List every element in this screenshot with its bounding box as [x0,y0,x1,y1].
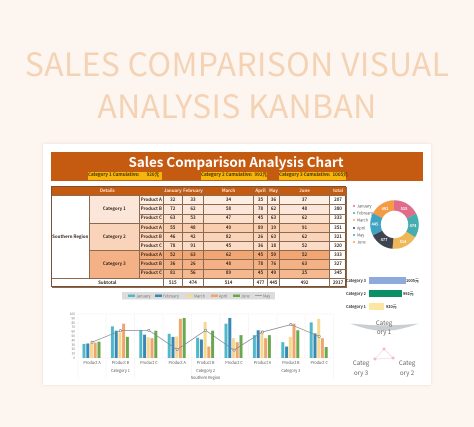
sales data table: 62 [226,252,231,258]
sales data table: 58 [226,206,231,212]
sales data table: 48 [302,206,307,212]
sales data table: 19 [271,225,276,231]
x axis labels: Product A [254,360,272,366]
title bar [51,152,423,181]
donut chart: 445 [372,222,379,228]
white sheet panel [43,144,431,385]
category 2 label: Categ [399,358,416,367]
category progress bars: Category 1 [346,304,366,310]
cumulative label 3: Category 3 Cumulative: 1005元 [279,172,348,178]
sales data table: 320 [334,243,342,249]
y axis labels: 100 [70,311,75,316]
sales data table: 477 [257,280,264,286]
sales data table [51,186,346,287]
curved category 1 shape [350,324,419,331]
sales data table: Product B [141,261,162,267]
chart legend: January [136,294,151,300]
sales data table: 55 [170,225,175,231]
sales data table: 515 [169,280,177,286]
sales data table: Subtotal [98,280,116,286]
page title [25,40,449,128]
sales data table: February [183,188,203,194]
donut chart: 492 [382,207,389,212]
sales data table: Category 1 [103,206,126,212]
x axis labels [83,360,328,381]
sales data table: 91 [302,225,307,231]
sales data table: 380 [334,206,342,212]
y axis labels: 20 [71,346,75,351]
category 3 label: Categ [353,358,370,367]
sales data table: 514 [225,280,232,286]
category progress bars: Category 2 [346,291,367,297]
sales data table: 492 [301,280,308,286]
y axis labels: 70 [71,324,75,329]
May line series [91,324,320,351]
sales data table: 474 [189,280,197,286]
sales data table: 63 [271,215,276,221]
x axis labels: Category 2 [196,368,215,374]
sales data table: March [222,188,235,194]
sales data table: 45 [258,252,263,258]
x axis labels: Product B [282,360,300,366]
y axis labels: 0 [73,355,75,360]
sales data table: Product C [141,270,162,276]
sales data table: 25 [302,270,307,276]
sales data table: Product A [141,225,162,231]
sales data table: 36 [170,261,175,267]
sales data table: 63 [190,252,196,258]
sales data table: 36 [258,243,263,249]
sales data table: 62 [302,234,307,240]
sales data table: Product B [141,206,162,212]
sales data table: 333 [334,252,342,258]
sales data table: 63 [271,234,276,240]
sales data table: 56 [190,270,196,276]
x axis labels: Category 3 [281,368,300,374]
sales data table: Product C [141,215,162,221]
sales data table: Product B [141,234,162,240]
sales data table: 333 [334,215,342,221]
sales data table: 62 [271,206,276,212]
donut legend: January [357,204,372,210]
x axis labels: Category 1 [111,368,130,374]
sales data table: 45 [258,215,263,221]
sales data table: 52 [170,252,175,258]
y axis labels: 60 [71,329,75,334]
category 1 label: Categ [376,318,393,327]
chart title: Sales Comparison Analysis Chart [128,151,344,171]
donut chart: 515 [401,207,408,212]
sales data table: 26 [258,234,263,240]
sales data table: 37 [302,197,307,203]
chart legend: April [219,294,227,300]
sales data table: 89 [258,225,263,231]
chart legend: June [241,294,250,300]
category progress bars [346,277,419,310]
donut legend: February [357,210,373,216]
category 2 label [399,358,416,377]
sales data table: total [333,188,343,194]
donut legend: April [357,226,365,232]
sales data table: June [299,188,310,194]
sales data table: 78 [258,206,263,212]
sales data table: 33 [190,197,196,203]
y axis labels: 10 [71,351,75,356]
y axis labels [70,311,75,360]
sales data table: 207 [334,197,342,203]
category 1 label: ory 1 [377,327,392,336]
sales data table: 48 [190,225,196,231]
sales data table: 52 [302,252,307,258]
donut legend: June [357,240,366,246]
sales data table: 345 [334,270,342,276]
sales data table: 48 [226,261,231,267]
sales data table: May [269,188,278,194]
y axis labels: 30 [71,342,75,347]
sales data table: 327 [334,261,342,267]
sales data table: 49 [226,225,231,231]
donut legend [353,204,373,246]
x axis labels: Product C [310,360,328,366]
sales data table: January [164,188,182,194]
y axis labels: 50 [71,333,75,338]
sales data table: 76 [271,261,276,267]
sales data table: 78 [258,261,263,267]
x axis labels: Product C [140,360,158,366]
sales data table: 91 [190,243,196,249]
triangle relationship icon [374,348,394,360]
sales data table: 53 [190,215,196,221]
sales data table: 49 [271,270,276,276]
sales data table: 81 [170,270,175,276]
sales data table: 63 [170,215,175,221]
chart legend [122,292,275,300]
sales data table: 59 [271,252,276,258]
sales data table: 47 [226,215,231,221]
sales data table: 34 [226,197,231,203]
category 3 label: ory 3 [354,368,369,377]
y axis labels: 90 [71,315,75,320]
cumulative label 1: Category 1 Cumulative: 920元 [88,172,159,178]
sales data table: April [255,188,266,194]
category progress bars: 1005元 [406,279,419,284]
x axis labels: Product B [112,360,130,366]
sales data table: Product A [141,197,162,203]
sales data table: 82 [226,234,231,240]
sales data table: 63 [302,261,307,267]
sales data table: Product A [141,252,162,258]
sales data table: 45 [258,270,263,276]
sales data table: 32 [170,197,175,203]
donut chart [372,206,417,245]
donut chart: 477 [381,238,388,243]
x axis labels: Product A [83,360,101,366]
category 1 label [376,318,393,336]
clustered bar chart [82,318,328,358]
sales data table: 62 [302,215,307,221]
category progress bars: 992元 [403,292,414,297]
sales data table: 72 [170,206,175,212]
sales data table: 351 [334,225,342,231]
chart legend: March [194,294,205,300]
sales data table: 26 [190,261,196,267]
sales data table: 89 [226,270,231,276]
sales data table: Product C [141,243,162,249]
chart legend: May [263,294,270,300]
x axis labels: Southern Region [191,375,220,381]
donut legend: March [357,218,368,224]
sales data table: 445 [270,280,277,286]
x axis labels: Product C [225,360,243,366]
y axis labels: 40 [71,337,75,342]
sales data table: Category 3 [103,261,126,267]
sales data table: 52 [302,243,307,249]
x axis labels: Product B [197,360,215,366]
sales data table: 62 [190,206,196,212]
sales data table: 36 [271,197,276,203]
sales data table: 45 [226,243,231,249]
category 3 label [353,358,370,377]
sales data table: 18 [271,243,276,249]
donut chart: 474 [410,224,417,229]
donut chart: 514 [400,240,407,245]
sales data table: Category 2 [103,234,126,240]
category 2 label: ory 2 [400,368,415,377]
chart legend: February [163,294,179,300]
sales data table: 78 [170,243,175,249]
x axis labels: Product A [169,360,187,366]
y axis labels: 80 [71,320,75,325]
sales data table: Details [100,188,115,194]
sales data table: 321 [334,234,342,240]
page title: SALES COMPARISON VISUAL [25,40,449,86]
cumulative label 2: Category 2 Cumulative: 992元 [201,172,267,178]
sales data table: Southern Region [52,234,88,240]
sales data table: 42 [190,234,196,240]
sales data table: 2917 [333,280,343,286]
sales data table: 35 [258,197,263,203]
category progress bars: Category 3 [346,278,367,284]
page title: ANALYSIS KANBAN [97,82,377,128]
donut legend: May [357,234,364,238]
category progress bars: 920元 [386,305,397,310]
chart gridlines [78,314,334,379]
sales data table: 46 [170,234,175,240]
